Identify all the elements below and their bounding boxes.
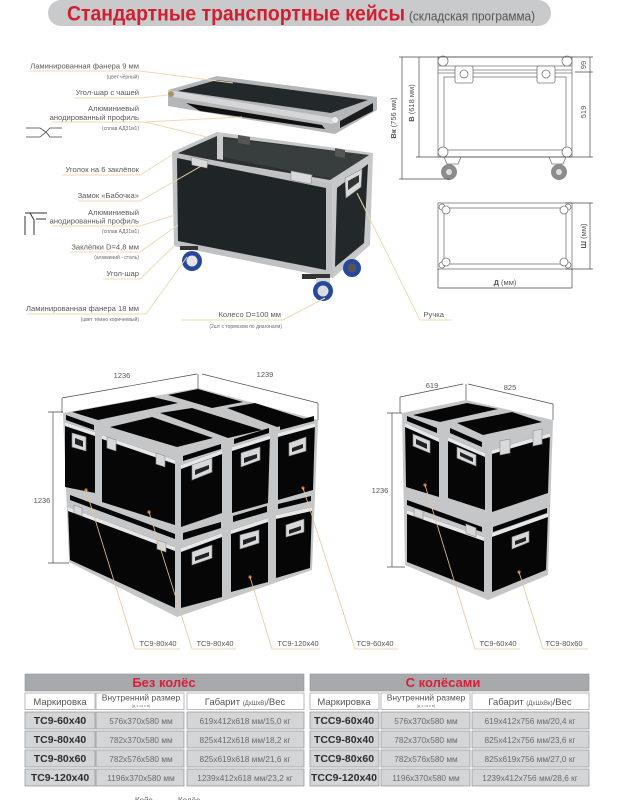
- model callouts: [84, 483, 588, 649]
- table: without wheels: 825х619х618 мм/21,6 кг: [200, 754, 290, 764]
- label: aluminium profile top: анодированный профиль: [50, 113, 139, 122]
- table: with wheels: С колёсами: [406, 675, 480, 690]
- silver lid bands: [405, 423, 550, 541]
- table: with wheels: 825х412х756 мм/23,6 кг: [485, 735, 575, 745]
- stacked cases: right group: [402, 400, 553, 600]
- latches: [191, 135, 345, 184]
- table: without wheels: 576х370х580 мм: [109, 716, 173, 726]
- label: ball corner with cup: Угол-шар с чашей: [76, 88, 139, 97]
- model callouts: ТС9-120х40: [277, 639, 319, 648]
- technical drawing: side view: [389, 56, 593, 180]
- dimensions of stacks: 825: [504, 383, 516, 392]
- silver lid bands: [65, 422, 315, 552]
- label: plywood 9 mm: (цвет чёрный): [107, 74, 139, 80]
- label: wheel: [181, 298, 325, 330]
- technical drawing: top view: [438, 203, 593, 288]
- case with lid: exploded photo: [168, 76, 377, 301]
- label: ball corner: Угол-шар: [106, 269, 139, 278]
- table: with wheels: ТСС9-60х40: [314, 715, 374, 727]
- table: with wheels: 576х370х580 мм: [394, 716, 458, 726]
- dimensions of stacks: 619: [426, 381, 438, 390]
- table: with wheels: 619х412х756 мм/20,4 кг: [485, 716, 575, 726]
- table: without wheels: (д х ш х в): [132, 703, 151, 708]
- label: wheel: Колесо D=100 мм: [218, 310, 281, 319]
- dimensions of stacks: 1239: [257, 370, 273, 379]
- label: plywood 18 mm: (цвет тёмно коричневый): [81, 316, 139, 323]
- case body front: [172, 152, 333, 278]
- handles and latches: [413, 429, 542, 549]
- stacked cases: left group: [63, 388, 318, 617]
- table: without wheels: ТС9-80х60: [34, 753, 86, 765]
- table: with wheels: 1239х412х756 мм/28,6 кг: [482, 773, 578, 783]
- icon: profile section 1: [26, 128, 62, 137]
- label: plywood 9 mm: Ламинированная фанера 9 мм: [30, 62, 139, 70]
- title banner: Стандартные транспортные кейсы: [67, 2, 405, 26]
- label: rivets: (алюминий - сталь): [94, 254, 139, 261]
- technical drawing: top view: Д (мм): [494, 278, 517, 287]
- table: without wheels: 1239х412х618 мм/23,2 кг: [197, 773, 293, 783]
- dimensions: 99: [579, 61, 588, 69]
- label: aluminium profile top: (сплав АД31м1): [102, 126, 139, 132]
- clipped footer text: [135, 796, 200, 800]
- case body side: [332, 153, 373, 278]
- table: with wheels: 782х370х580 мм: [394, 735, 458, 745]
- dimensions: [389, 57, 593, 179]
- label: ball corner: [103, 245, 175, 279]
- label: aluminium profile side: (сплав АД31м1): [102, 229, 139, 235]
- top panels: [413, 403, 542, 435]
- label: plywood 18 mm: [26, 257, 187, 323]
- label: rivets: [70, 225, 178, 261]
- label: butterfly lock: [78, 165, 203, 201]
- table: without wheels: 825х412х618 мм/18,2 кг: [200, 735, 290, 745]
- table: with wheels: ТСС9-80х40: [314, 734, 374, 746]
- dimensions: 519: [579, 106, 588, 118]
- callout labels around the case: [25, 62, 452, 330]
- table: with wheels: [310, 674, 589, 786]
- lower row faces: [68, 507, 312, 608]
- title banner: (складская программа): [409, 10, 535, 24]
- dimensions of stacks: 1236: [34, 496, 50, 505]
- table: with wheels: ТСС9-120х40: [311, 772, 377, 784]
- table: without wheels: [25, 674, 304, 786]
- label: aluminium profile top: Алюминиевый: [88, 104, 139, 113]
- latches: [74, 437, 166, 552]
- label: handle: Ручка: [423, 310, 445, 319]
- technical drawing: top view: Ш (мм): [579, 223, 588, 248]
- faces: [405, 423, 550, 592]
- top panels: [72, 389, 308, 447]
- dimensions of stacks: 1236: [114, 371, 130, 380]
- label: handle: [357, 193, 452, 320]
- label: aluminium profile top: [50, 104, 242, 137]
- table: without wheels: Маркировка: [33, 697, 87, 708]
- model callouts: ТС9-60х40: [356, 639, 394, 648]
- label: aluminium profile side: анодированный профиль: [50, 216, 139, 226]
- wheels: [441, 164, 567, 180]
- label: ball corner with cup: [74, 88, 168, 98]
- table: without wheels: 782х370х580 мм: [109, 735, 173, 745]
- wheels: [180, 246, 361, 301]
- label: corner with 6 rivets: [62, 155, 172, 175]
- table: without wheels: ТС9-60х40: [34, 715, 86, 727]
- table: without wheels: Без колёс: [132, 675, 196, 690]
- label: aluminium profile side: Алюминиевый: [88, 208, 139, 217]
- table: with wheels: 782х576х580 мм: [394, 754, 458, 764]
- table: with wheels: Габарит (ДхШхВк)/Вес: [488, 697, 572, 708]
- model callouts: ТС9-80х60: [545, 639, 583, 648]
- dimensions of stacks: 1236: [372, 486, 388, 495]
- label: corner with 6 rivets: Уголок на 6 заклёпок: [65, 165, 140, 174]
- model callouts: ТС9-60х40: [479, 639, 517, 648]
- dimensions of stacks: [34, 370, 553, 567]
- lid side strips: [407, 416, 547, 532]
- table: with wheels: 1196х370х580 мм: [392, 773, 460, 783]
- case body interior: [172, 132, 373, 186]
- upper row faces: [65, 422, 315, 527]
- dimensions: В (618 мм): [407, 84, 416, 122]
- table: without wheels: Габарит (ДхШхВ)/Вес: [205, 697, 286, 708]
- icon: handle: [345, 169, 362, 198]
- table: without wheels: 1196х370х580 мм: [107, 773, 175, 783]
- lid: [168, 76, 377, 134]
- table: with wheels: Маркировка: [317, 697, 371, 708]
- table: without wheels: 782х576х580 мм: [109, 754, 173, 764]
- label: butterfly lock: Замок «Бабочка»: [78, 191, 139, 200]
- table: without wheels: ТС9-80х40: [34, 734, 86, 746]
- table: without wheels: ТС9-120х40: [31, 772, 89, 784]
- table: with wheels: ТСС9-80х60: [314, 753, 374, 765]
- lid side strips: [66, 415, 314, 540]
- table: without wheels: Внутренний размер: [102, 692, 181, 702]
- table: with wheels: (д х ш х в): [417, 703, 436, 708]
- dimensions: Вк (756 мм): [389, 97, 398, 139]
- model callouts: ТС9-80х40: [139, 639, 177, 648]
- model callouts: ТС9-80х40: [196, 639, 234, 648]
- table: without wheels: 619х412х618 мм/15,0 кг: [200, 716, 290, 726]
- label: plywood 9 mm: [30, 62, 233, 83]
- handles: [72, 433, 306, 565]
- table: with wheels: 825х619х756 мм/27,0 кг: [485, 754, 575, 764]
- label: rivets: Заклёпки D=4,8 мм: [71, 242, 139, 252]
- label: wheel: (2шт с тормозом по диагонали): [209, 324, 282, 330]
- icon: profile section 2: [25, 213, 47, 235]
- table: with wheels: Внутренний размер: [387, 692, 466, 702]
- label: plywood 18 mm: Ламинированная фанера 18 мм: [26, 304, 139, 313]
- label: aluminium profile side: [50, 208, 175, 235]
- title banner: [48, 0, 551, 26]
